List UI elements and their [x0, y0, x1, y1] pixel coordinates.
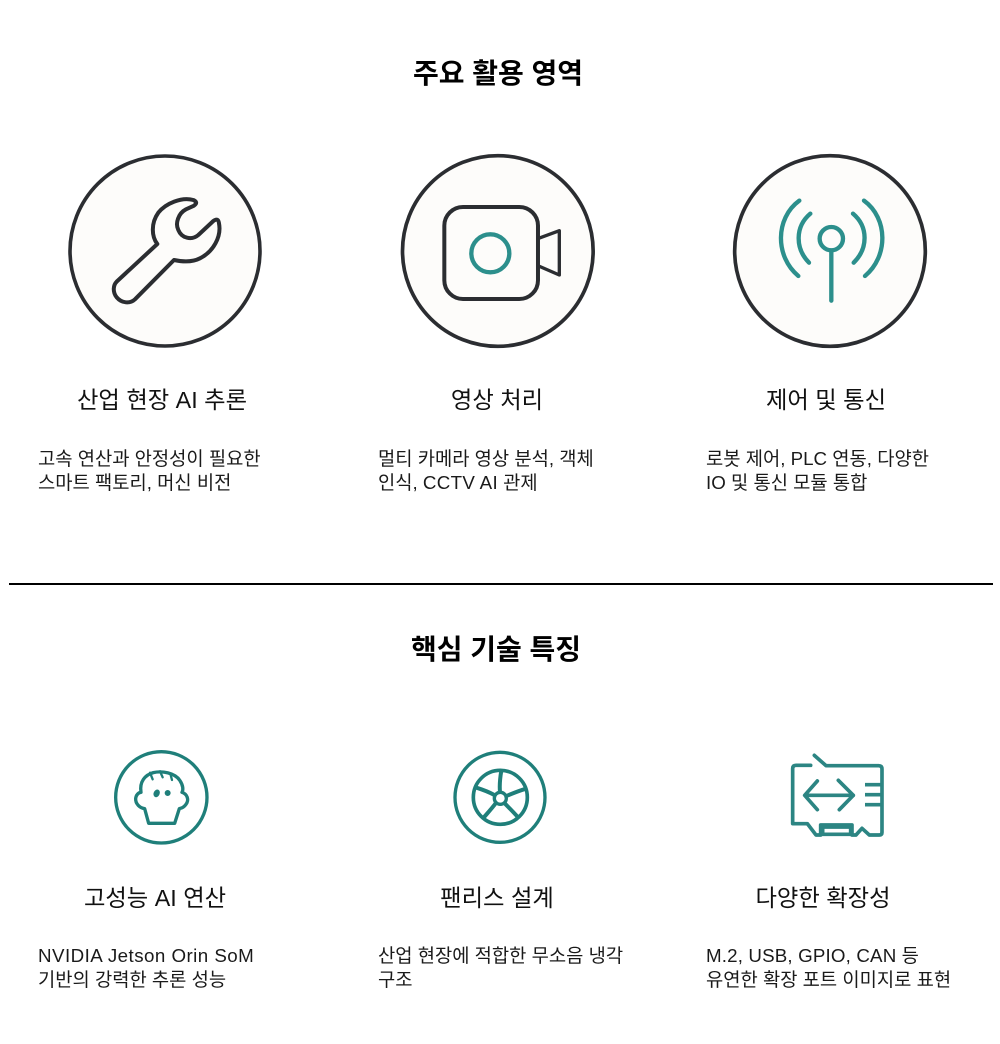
- icon: wrench: [70, 156, 260, 346]
- icon: expansion card: [793, 755, 882, 835]
- card text: expansion: [706, 945, 951, 990]
- card heading: video: 영상 처리: [451, 387, 543, 413]
- card text: video: 인식, CCTV AI 관제: [378, 472, 538, 493]
- card heading: performance: 고성능 AI 연산: [84, 885, 226, 911]
- icon: antenna signal: [735, 156, 925, 346]
- card text: fanless: 산업 현장에 적합한 무소음 냉각: [378, 945, 623, 966]
- title: main uses: 주요 활용 영역: [413, 58, 583, 89]
- card text: performance: [38, 945, 254, 990]
- card text: control: 로봇 제어, PLC 연동, 다양한: [706, 448, 929, 469]
- icon: video camera: [402, 156, 593, 346]
- card text: expansion: 유연한 확장 포트 이미지로 표현: [706, 969, 951, 990]
- card text: expansion: M.2, USB, GPIO, CAN 등: [706, 945, 919, 966]
- card heading: control: 제어 및 통신: [766, 387, 886, 413]
- divider: [9, 583, 993, 585]
- card text: industrial AI: 고속 연산과 안정성이 필요한: [38, 448, 261, 469]
- card text: industrial AI: 스마트 팩토리, 머신 비전: [38, 472, 231, 493]
- icon: brain / chip head: [116, 752, 207, 843]
- card text: control: IO 및 통신 모듈 통합: [706, 472, 867, 493]
- card text: control: [706, 448, 929, 493]
- card heading: industrial AI: 산업 현장 AI 추론: [77, 387, 247, 413]
- card text: fanless: [378, 945, 623, 990]
- card text: video: [378, 448, 594, 493]
- title: core features: 핵심 기술 특징: [411, 634, 581, 665]
- card heading: fanless: 팬리스 설계: [440, 885, 554, 911]
- card text: performance: NVIDIA Jetson Orin SoM: [38, 945, 254, 966]
- card text: fanless: 구조: [378, 969, 412, 990]
- card heading: expansion: 다양한 확장성: [755, 885, 891, 911]
- card text: performance: 기반의 강력한 추론 성능: [38, 969, 226, 990]
- icon: fan: [455, 752, 545, 842]
- card text: industrial AI: [38, 448, 261, 493]
- card text: video: 멀티 카메라 영상 분석, 객체: [378, 448, 594, 469]
